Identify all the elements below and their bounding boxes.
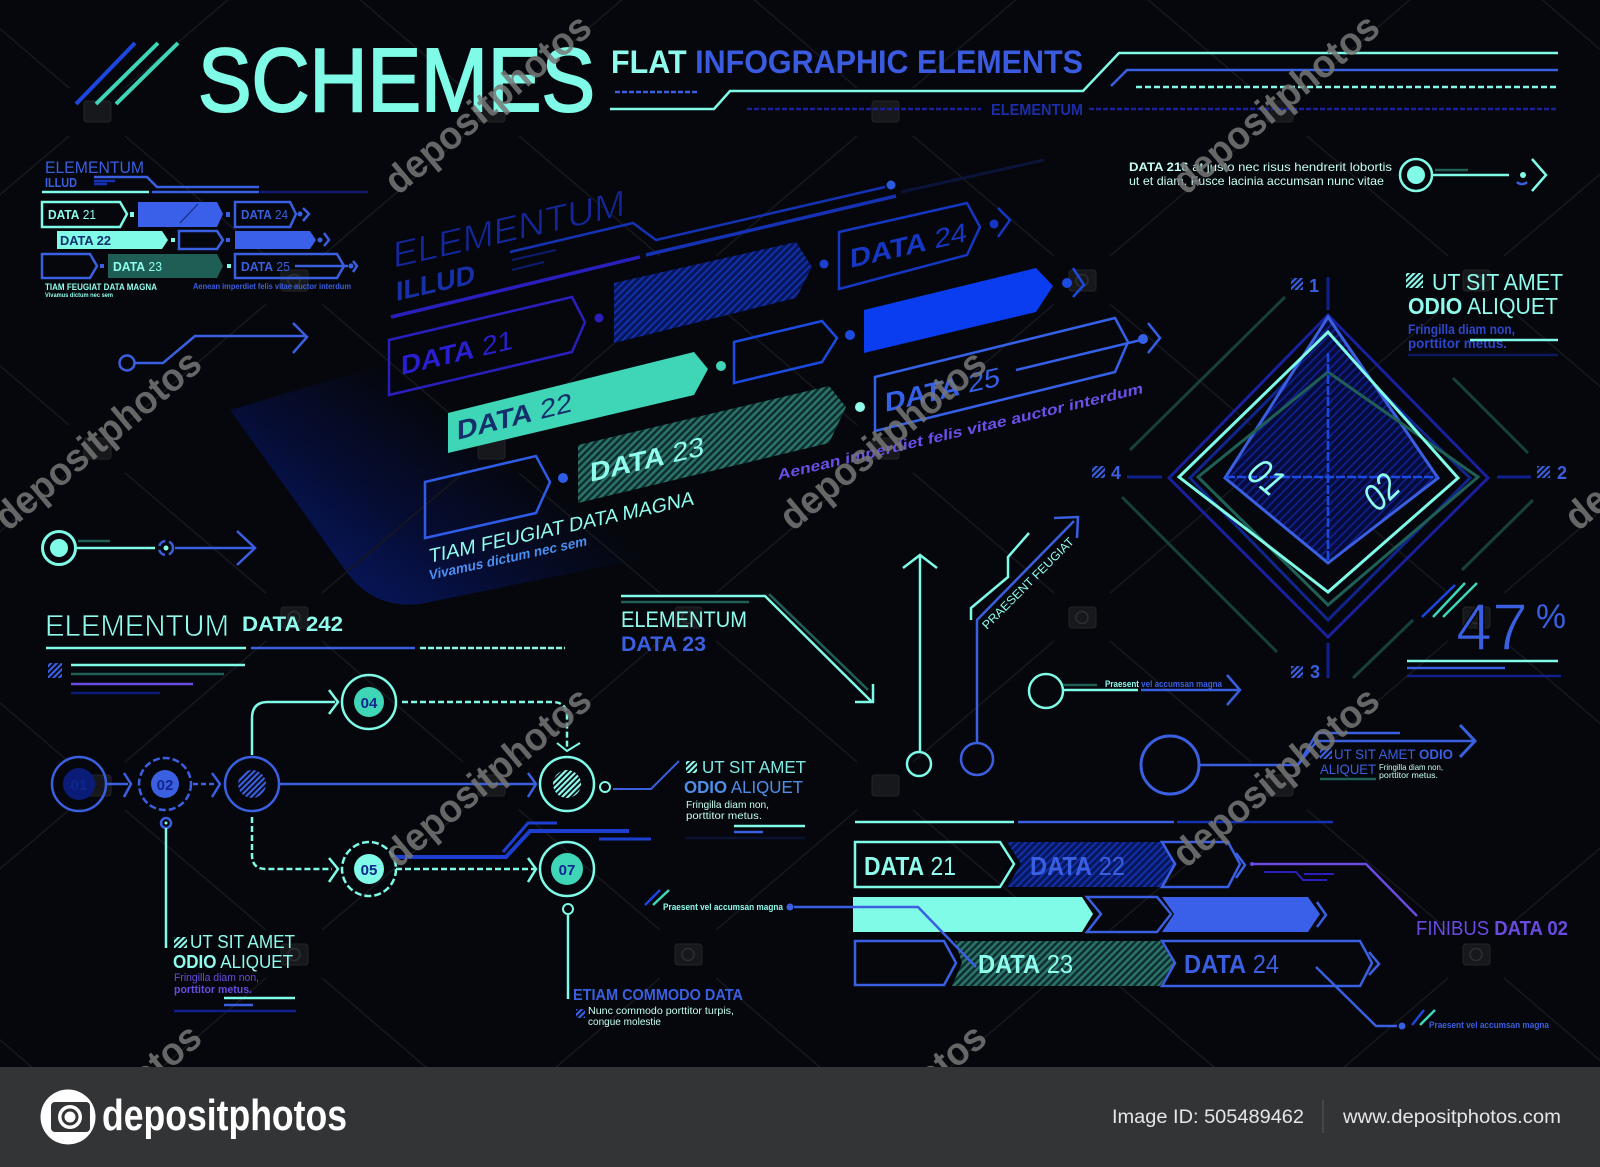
node 04: 04 <box>361 695 378 712</box>
node 07 <box>540 842 594 896</box>
axis label 1: 1 <box>1309 276 1319 296</box>
text block: ut sit amet lower left: UT SIT AMET <box>190 932 295 952</box>
panel: chevron data bars <box>853 822 1379 986</box>
text block: ut sit amet top right <box>1406 269 1563 355</box>
axis label 4 <box>1092 463 1121 483</box>
radar labels: 01 <box>1239 451 1292 505</box>
heading lines <box>391 160 1044 317</box>
heading: ILLUD <box>396 258 475 307</box>
row 2: DATA 22 <box>60 233 111 248</box>
row 3: DATA 24 <box>1184 949 1279 979</box>
row 2 <box>57 231 329 249</box>
node 02: 02 <box>157 777 173 794</box>
heading: ELEMENTUM <box>45 159 144 177</box>
heading: elementum data 242 <box>45 608 565 693</box>
text block: ut sit amet middle: Fringilla diam non, <box>686 799 769 811</box>
text block: ut sit amet top right: porttitor metus. <box>1408 335 1507 351</box>
text block: ut sit amet lower left: Fringilla diam non, <box>174 972 259 984</box>
hatched bar <box>614 242 828 343</box>
callout: finibus data 02: FINIBUS DATA 02 <box>1416 918 1568 940</box>
branch up to 04 <box>252 690 338 755</box>
heading: elementum data 242: ELEMENTUM <box>45 608 229 643</box>
node 05: 05 <box>361 862 377 879</box>
dashed link 04 to 06 <box>402 702 580 751</box>
top rule <box>855 821 1333 823</box>
axis label 3 <box>1291 662 1320 682</box>
node 03 <box>225 757 536 811</box>
captions: Aenean imperdiet felis vitae auctor interdum <box>193 282 351 291</box>
radar labels <box>1239 451 1408 519</box>
footer divider <box>1322 1100 1324 1133</box>
row 1 <box>855 842 1245 887</box>
callout: praesent left <box>645 890 976 967</box>
data 22 <box>448 352 726 453</box>
text block: ut sit amet top right: Fringilla diam non, <box>1408 321 1515 337</box>
stat: 47 percent: 47 <box>1456 590 1528 665</box>
axis label 1 <box>1291 276 1319 296</box>
row 1: DATA 22 <box>1030 851 1125 881</box>
axis label 4: 4 <box>1111 463 1121 483</box>
text block: etiam commodo data: ETIAM COMMODO DATA <box>573 987 743 1004</box>
row 2 <box>853 897 1326 932</box>
callout: large circle arrow: UT SIT AMET ODIO <box>1334 746 1453 762</box>
background glow panel <box>230 300 1170 605</box>
heading: ELEMENTUM <box>393 182 625 276</box>
data 23 <box>578 386 865 503</box>
connector from 02 <box>161 818 171 948</box>
row 3 <box>855 941 1379 986</box>
row 3 <box>42 254 357 278</box>
arrow: praesent feugiat <box>961 517 1078 775</box>
text block: DATA 216 at justo nec risus hendrerit lobortis <box>1129 160 1375 174</box>
node 02 <box>139 758 220 810</box>
arrow: praesent feugiat: PRAESENT FEUGIAT <box>979 534 1077 632</box>
panel: small data chart <box>42 159 368 299</box>
row 1: DATA 21 <box>864 851 956 881</box>
axis label 2: 2 <box>1557 463 1567 483</box>
axis label 2 <box>1537 463 1567 483</box>
circuit accent lines <box>394 823 651 857</box>
panel: skewed perspective data chart <box>389 160 1160 584</box>
node 06 <box>540 757 594 811</box>
footer url: www.depositphotos.com <box>1342 1107 1561 1128</box>
text block: etiam commodo data: Nunc commodo porttitor turpis, <box>588 1005 734 1017</box>
text block: etiam commodo data <box>573 987 743 1028</box>
data 25 <box>875 318 1160 431</box>
callout: data 216 <box>1129 159 1546 191</box>
arrow: vertical up <box>903 555 937 776</box>
subtitle: FLAT INFOGRAPHIC ELEMENTS <box>611 44 1083 80</box>
text block: ut sit amet middle: porttitor metus. <box>686 810 762 822</box>
heading <box>45 159 144 190</box>
row 3: DATA 23 <box>978 949 1073 979</box>
branch down to 05 <box>252 817 332 869</box>
callout: large circle arrow: porttitor metus. <box>1379 770 1438 780</box>
text block: ut sit amet lower left: ODIO ALIQUET <box>173 952 293 972</box>
row 3: DATA 25 <box>241 259 290 274</box>
row 3: DATA 23 <box>113 259 162 274</box>
stat: 47 percent <box>1407 583 1566 676</box>
callout: praesent right <box>1316 967 1550 1030</box>
data 24: DATA 24 <box>850 216 967 274</box>
stat: 47 percent: % <box>1536 598 1566 636</box>
panel: radar chart <box>1092 276 1567 682</box>
radar grid <box>1122 277 1533 678</box>
callout: praesent right: Praesent vel accumsan magna <box>1429 1020 1550 1030</box>
captions <box>45 282 351 299</box>
heading: elementum data 242: DATA 242 <box>242 613 343 636</box>
header <box>76 31 1558 131</box>
callout: large circle arrow: ALIQUET <box>1320 761 1376 777</box>
callout: praesent left: Praesent vel accumsan magna <box>663 902 784 912</box>
callout: large circle arrow <box>1141 725 1475 794</box>
text block: ut sit amet lower left: porttitor metus. <box>174 984 252 996</box>
watermarks: depositphotos <box>1164 678 1388 876</box>
row 1 <box>42 202 309 227</box>
arrow: target arrow left <box>42 531 255 565</box>
arrow: praesent vel accumsan: Praesent vel accumsan magna <box>1105 679 1223 689</box>
caption sub: Vivamus dictum nec sem <box>429 533 587 584</box>
header circuit lines <box>610 53 1558 109</box>
node 01: 01 <box>71 777 87 794</box>
caption title: TIAM FEUGIAT DATA MAGNA <box>429 488 694 568</box>
data 21 <box>389 297 604 395</box>
radar series <box>1179 317 1478 605</box>
row 1: DATA 24 <box>241 207 288 222</box>
flow chart <box>52 675 679 999</box>
text block: ut sit amet middle: ODIO ALIQUET <box>684 777 803 797</box>
arrow: praesent vel accumsan <box>1029 674 1240 708</box>
outline box row 3 <box>425 456 568 538</box>
connector icon <box>1400 159 1546 191</box>
data 24 <box>839 203 1010 289</box>
node 01 <box>52 757 131 811</box>
row 1: DATA 21 <box>48 207 96 222</box>
text block: ut et diam. Fusce lacinia accumsan nunc vitae <box>1129 174 1384 188</box>
title: SCHEMES <box>198 31 595 131</box>
text block: ut sit amet middle: UT SIT AMET <box>702 757 806 777</box>
footer logo text: depositphotos <box>102 1091 347 1140</box>
captions: Vivamus dictum nec sem <box>45 292 113 299</box>
callout: finibus data 02 <box>1250 862 1568 940</box>
text block: ut sit amet top right: ODIO ALIQUET <box>1408 293 1558 319</box>
arrow into 05 <box>329 858 338 882</box>
node 04 <box>342 675 396 729</box>
image id: Image ID: 505489462 <box>1112 1107 1304 1128</box>
data 23: DATA 23 <box>590 431 704 488</box>
footer logo icon <box>40 1090 96 1144</box>
watermarks: depositphotos <box>376 5 600 203</box>
header label: ELEMENTUM <box>991 102 1083 119</box>
heading: ILLUD <box>45 176 77 190</box>
watermarks: depositphotos <box>771 341 995 539</box>
node 07: 07 <box>559 862 575 879</box>
text block: etiam commodo data: congue molestie <box>588 1016 661 1028</box>
caption purple: Aenean imperdiet felis vitae auctor interdum <box>778 380 1143 484</box>
radar labels: 02 <box>1355 466 1408 519</box>
heading lines <box>42 177 368 192</box>
dashed link 05 to 07 <box>396 858 536 882</box>
captions: TIAM FEUGIAT DATA MAGNA <box>45 282 157 293</box>
node 05 <box>342 842 396 896</box>
data 25: DATA 25 <box>885 361 1000 418</box>
icon: title slashes <box>76 43 178 104</box>
bright blue bar <box>864 268 1084 353</box>
data 21: DATA 21 <box>401 324 513 381</box>
text block: ut sit amet top right: UT SIT AMET <box>1432 269 1563 295</box>
footer bar <box>0 1067 1600 1167</box>
watermarks: depositphotos <box>376 678 600 876</box>
connector from 07 <box>563 904 573 999</box>
outline box row 2 <box>734 321 855 383</box>
callout: large circle arrow: Fringilla diam non, <box>1379 762 1443 772</box>
connector from 06 <box>600 761 679 792</box>
arrow: elementum data 23 <box>621 594 873 702</box>
arrow: elementum data 23: ELEMENTUM <box>621 607 747 632</box>
text block: ut sit amet middle <box>684 757 806 838</box>
text block: ut sit amet lower left <box>173 932 296 1011</box>
arrow: elementum data 23: DATA 23 <box>621 633 706 656</box>
axis label 3: 3 <box>1310 662 1320 682</box>
arrow: circuit arrow upper left <box>120 323 307 370</box>
data 22: DATA 22 <box>457 387 572 446</box>
watermarks: depositphotos <box>1164 5 1388 203</box>
